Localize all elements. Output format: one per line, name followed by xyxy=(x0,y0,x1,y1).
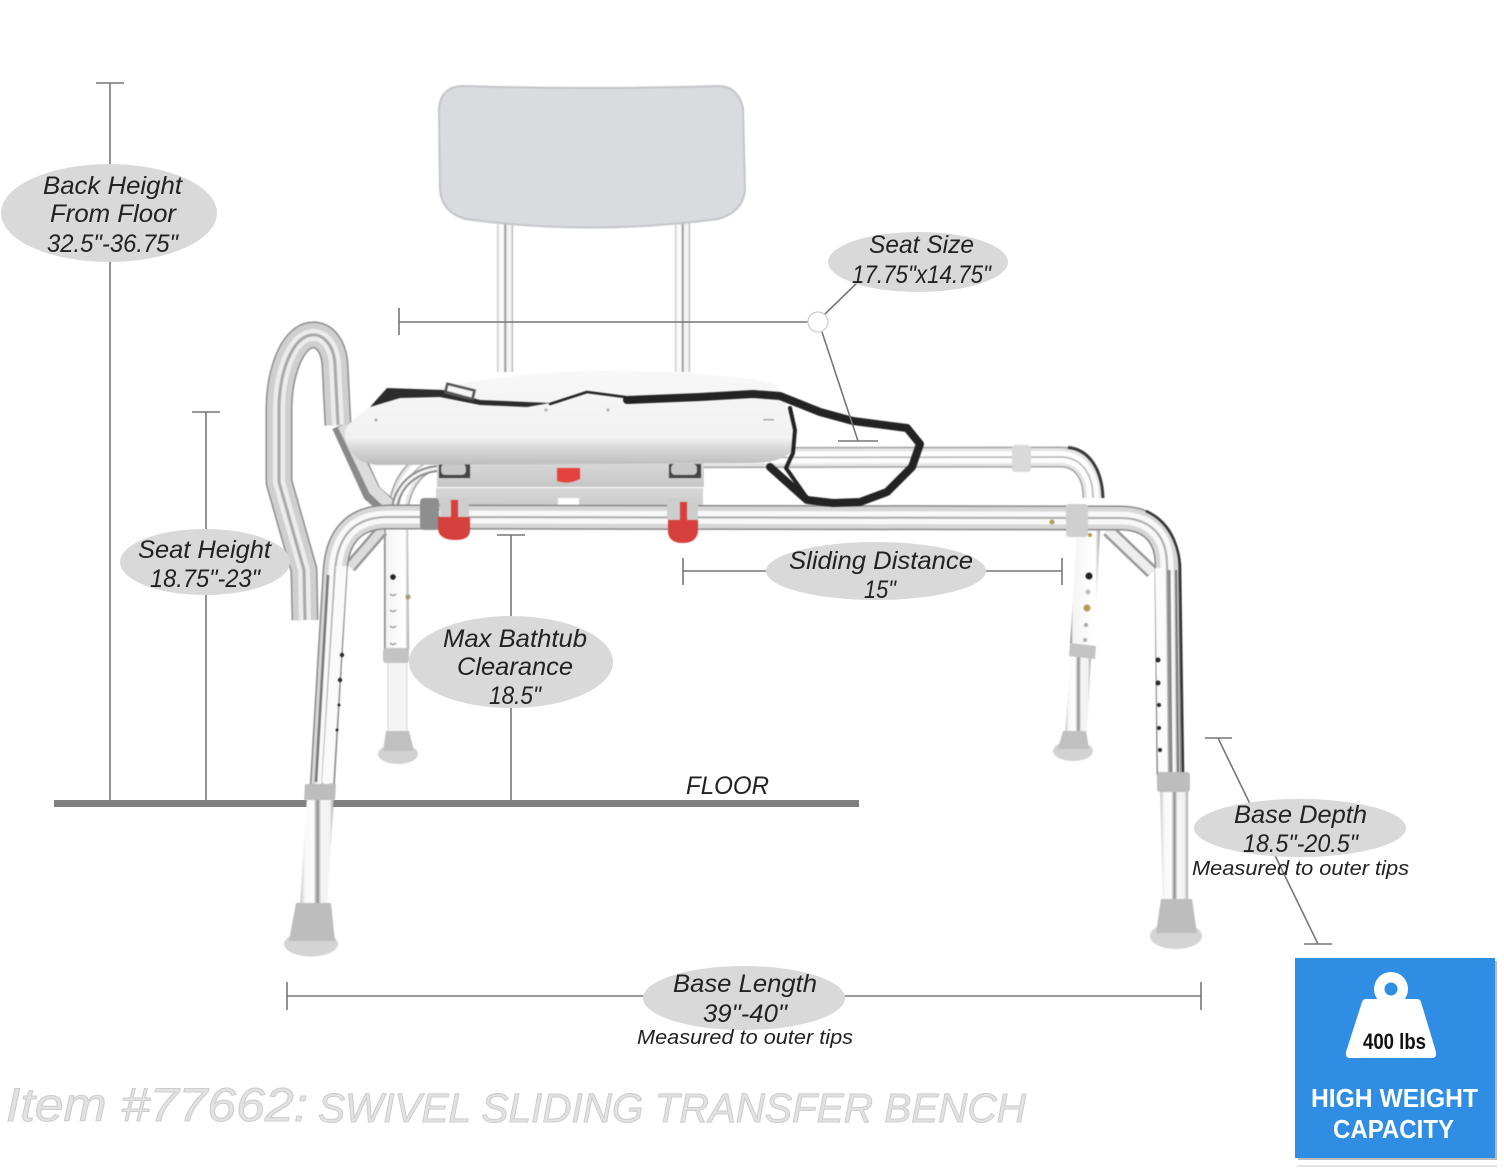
red release levers xyxy=(438,498,698,543)
rubber feet xyxy=(284,899,1202,956)
badge: high weight capacity xyxy=(1295,958,1497,1167)
armrest strut xyxy=(341,425,442,512)
dimension: seat height xyxy=(120,412,290,800)
dimension: back height xyxy=(1,83,217,800)
dimension: base depth xyxy=(1192,738,1409,944)
dimension: base length: 39"-40" xyxy=(703,1000,788,1028)
dimension: max bathtub clearance: 18.5" xyxy=(489,682,542,710)
seat mechanism xyxy=(436,463,704,513)
dimension: back height: From Floor xyxy=(50,200,178,228)
seat panel xyxy=(345,371,796,465)
back left leg xyxy=(378,527,418,764)
front rail collars and pin xyxy=(420,498,1092,537)
floor line xyxy=(54,800,859,807)
lower front legs xyxy=(300,772,1190,905)
dimension: base length xyxy=(287,966,1201,1049)
dimension: base depth: 18.5"-20.5" xyxy=(1243,830,1359,858)
floor label: FLOOR xyxy=(686,772,769,800)
dimension: sliding distance: 15" xyxy=(864,576,897,604)
safety strap xyxy=(370,384,920,503)
dimension: max bathtub clearance xyxy=(409,535,613,800)
backrest posts xyxy=(497,222,690,372)
armrest tube xyxy=(279,335,338,620)
backrest panel xyxy=(439,86,745,228)
dimension: base length: Measured to outer tips xyxy=(637,1027,853,1049)
bench illustration xyxy=(279,86,1202,956)
dimension: sliding distance xyxy=(683,542,1062,604)
back rail collar xyxy=(1012,445,1031,472)
product title: Item #77662: xyxy=(6,1078,308,1131)
back rail xyxy=(398,448,1103,512)
icon: weight xyxy=(1346,972,1436,1058)
dimension: seat size: 17.75"x14.75" xyxy=(852,261,992,289)
dimension: sliding distance: Sliding Distance xyxy=(789,547,973,575)
dimension: base length: Base Length xyxy=(673,970,817,998)
dimension: back height: Back Height xyxy=(43,172,183,200)
dimension: seat size xyxy=(399,231,1008,441)
dimension: max bathtub clearance: Max Bathtub xyxy=(443,625,587,653)
dimension: seat height: 18.75"-23" xyxy=(150,565,261,593)
badge: high weight capacity: HIGH WEIGHT xyxy=(1311,1083,1478,1113)
chrome leg reflections xyxy=(316,511,1183,783)
product title: SWIVEL SLIDING TRANSFER BENCH xyxy=(318,1085,1026,1131)
adjustment holes xyxy=(336,653,1162,752)
back right leg xyxy=(1053,530,1100,761)
dimension: seat size: Seat Size xyxy=(869,231,974,259)
badge: high weight capacity: CAPACITY xyxy=(1333,1114,1454,1144)
dimension: back height: 32.5"-36.75" xyxy=(47,230,179,258)
product title xyxy=(6,1078,1026,1131)
diagonal braces xyxy=(350,530,1152,572)
icon: weight: 400 lbs xyxy=(1363,1029,1426,1054)
front frame tube xyxy=(322,517,1169,790)
dimension: base depth: Measured to outer tips xyxy=(1192,858,1409,880)
dimension: seat height: Seat Height xyxy=(138,536,272,564)
dimension: max bathtub clearance: Clearance xyxy=(457,653,573,681)
dimension: base depth: Base Depth xyxy=(1234,801,1367,829)
